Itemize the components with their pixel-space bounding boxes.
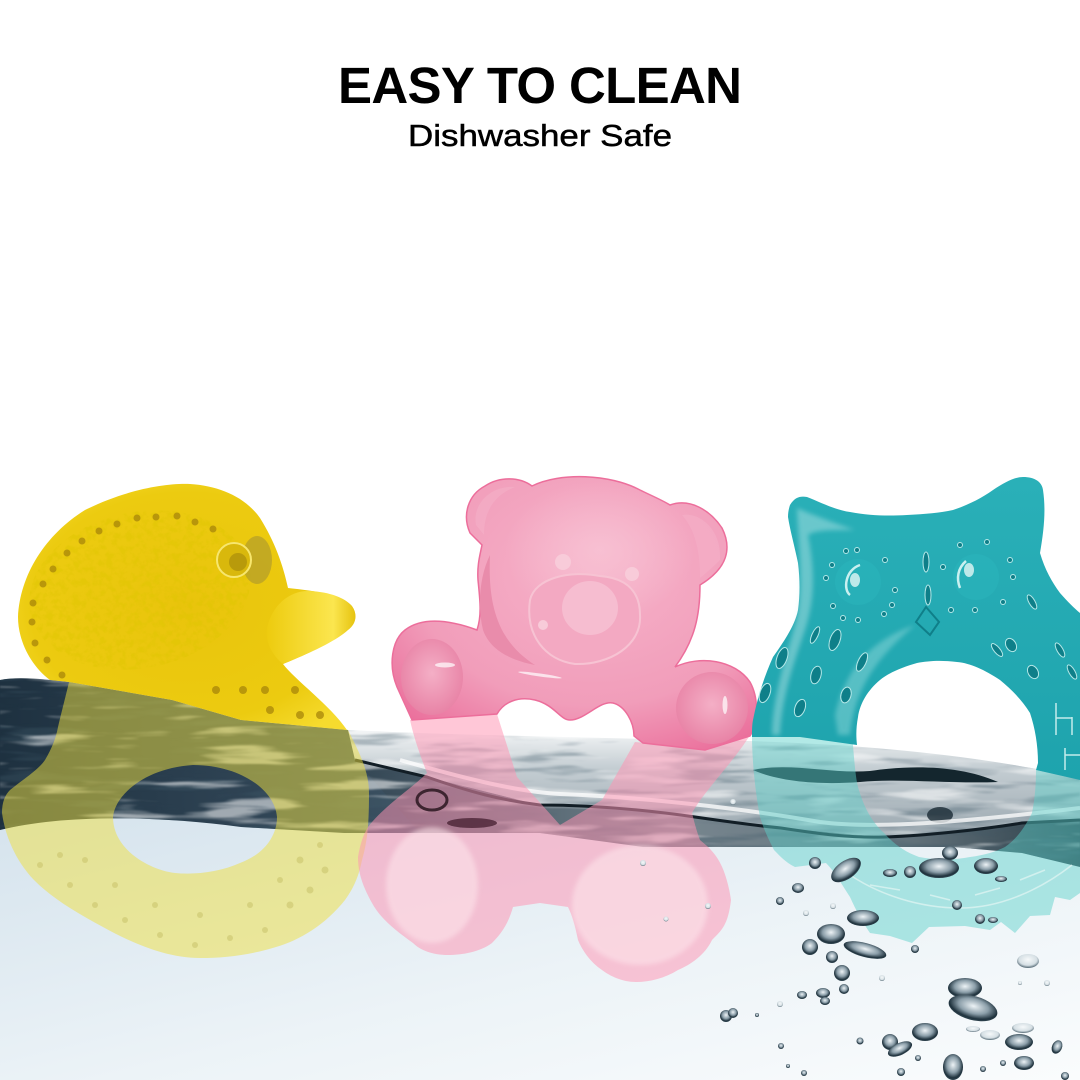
dark surface line: [355, 760, 1080, 837]
title: EASY TO CLEAN: [338, 57, 742, 114]
water surface band: [0, 672, 1080, 872]
duck inner grain: [20, 490, 280, 690]
bear ear inners: [475, 487, 720, 578]
submerged duck: [2, 682, 369, 958]
teether: yellow duck: [18, 484, 355, 730]
owl centre highlight: [835, 625, 915, 735]
water body below the surface: [0, 815, 1080, 1080]
white surface line: [400, 760, 1080, 825]
submerged duck bumps: [37, 842, 328, 948]
bear eyes: [538, 554, 639, 630]
bear nose: [562, 581, 618, 635]
submerged bear leg highlights: [386, 827, 708, 965]
dark bubble cluster: [927, 807, 953, 823]
silver right wave: [348, 730, 1080, 837]
teether: teal owl: [752, 477, 1080, 780]
duck beak: [267, 591, 355, 664]
water streak highlights: [0, 678, 1080, 850]
dark left wave: [0, 678, 540, 833]
subtitle: Dishwasher Safe: [408, 118, 672, 153]
owl body: [752, 477, 1080, 780]
duck body: [18, 484, 355, 730]
dark patch behind owl: [753, 767, 998, 783]
bear face light: [505, 480, 695, 620]
air bubbles: [417, 790, 1069, 1080]
bear left paw: [401, 639, 463, 715]
owl feather marks: [757, 540, 1079, 718]
submerged bear: [358, 714, 750, 982]
lower turbulent wave: [355, 760, 1080, 867]
bear muzzle: [529, 574, 640, 664]
bear right paw: [676, 672, 748, 744]
owl eyes: [835, 554, 999, 605]
owl left highlight: [772, 508, 855, 735]
bear face shade: [480, 555, 535, 665]
ring bubble on bear: [417, 790, 447, 810]
dark patch on bear leg: [447, 818, 497, 828]
bear highlights: [435, 662, 728, 714]
submerged owl: [752, 735, 1080, 943]
duck perimeter dots: [28, 512, 324, 719]
duck eye: [217, 536, 272, 584]
bear body: [392, 477, 756, 750]
owl beak: [916, 607, 939, 635]
teether: pink bear: [392, 477, 756, 750]
submerged owl ridge lines: [850, 865, 1072, 908]
owl raised lettering: [1056, 703, 1080, 770]
